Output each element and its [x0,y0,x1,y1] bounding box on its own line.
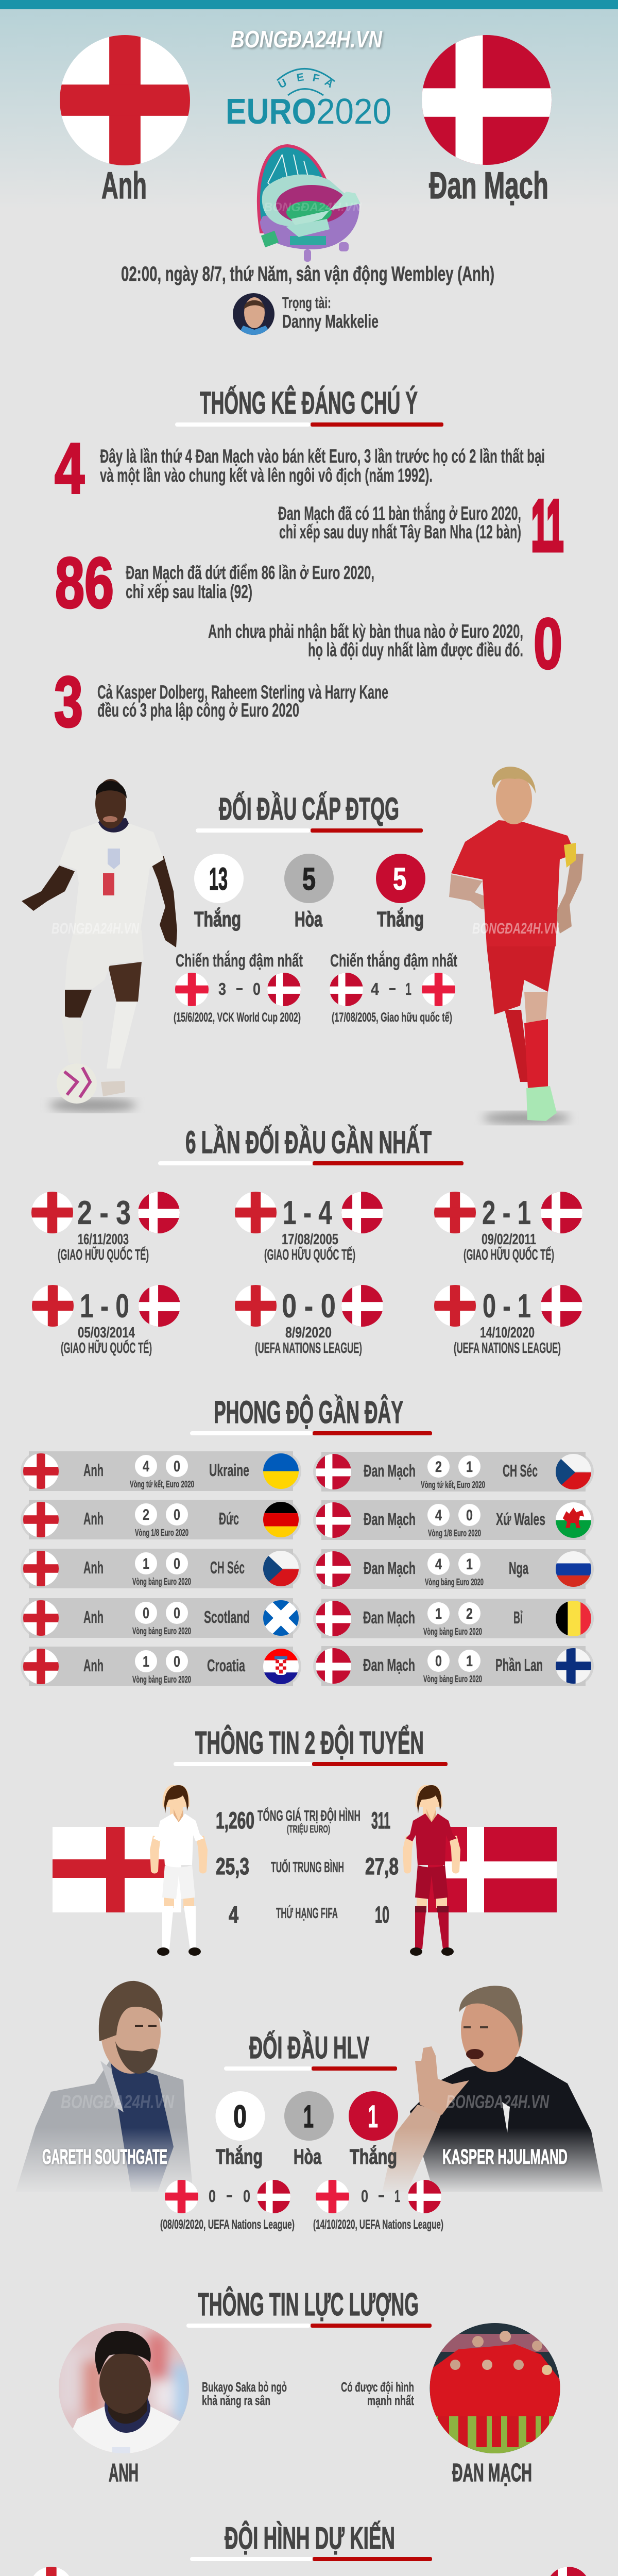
stat 4 [55,429,545,509]
form: England v Czech [21,1549,301,1588]
form: Denmark v Russia: 4 [435,1556,442,1573]
form: England v Scotland [21,1598,301,1638]
photo: Southgate: BONGĐA24H.VN [61,2091,175,2112]
stat 86 [55,543,374,623]
text: Denmark team news: Có được đội hình [341,2379,414,2395]
form: England v Germany: Anh [83,1509,104,1528]
logo: UEFA Euro 2020: A [322,76,335,90]
form: England v Croatia: Vòng bảng Euro 2020 [132,1674,191,1685]
form: Denmark v Wales [313,1500,594,1540]
coach totals: Hòa [294,2145,322,2168]
biggest win: Denmark [330,951,457,1025]
head-to-head totals: Thắng [194,907,241,931]
photo: Hjulmand [382,1986,603,2192]
form: England v Czech: 1 [143,1555,149,1572]
form: Denmark v Finland: 1 [466,1653,473,1670]
header gradient background [0,9,618,210]
match 2005: 1 - 4 [283,1194,332,1231]
head-to-head totals: 5 [393,861,406,896]
form: England v Czech: Anh [83,1558,104,1577]
flag: England on pitch [29,2567,73,2576]
text: England team news: khả năng ra sân [202,2393,270,2408]
player: Sterling: BONGĐA24H.VN [52,920,140,937]
form: Denmark v Belgium: Vòng bảng Euro 2020 [423,1626,482,1637]
team stats table: 1,260 [216,1807,254,1834]
biggest win: England [174,951,303,1025]
heading: Đối đầu cấp ĐTQG: ĐỐI ĐẦU CẤP ĐTQG [219,791,399,826]
biggest win: Denmark: 1 [405,979,411,998]
stat 3: 3 [54,662,83,742]
stat 86: Đan Mạch đã dứt điểm 86 lần ở Euro 2020, [126,562,374,583]
coach match 2: 1 [394,2187,400,2206]
biggest win: Denmark: Chiến thắng đậm nhất [330,951,457,971]
form: Denmark v Russia: Vòng bảng Euro 2020 [425,1577,484,1587]
team stats table: 25,3 [216,1853,249,1879]
form: Denmark v Russia [313,1549,594,1589]
heading: Thông tin lực lượng: THÔNG TIN LỰC LƯỢNG [198,2287,419,2323]
team stats table [216,1807,399,1928]
match 2014: 1 - 0 [80,1287,129,1325]
label: ANH: ANH [109,2459,139,2487]
form: Denmark v Finland: Phần Lan [495,1655,543,1674]
stat 4: 4 [55,429,84,509]
form: Denmark v Finland: Vòng bảng Euro 2020 [423,1674,482,1684]
coach totals: 1 [368,2099,378,2134]
form: Denmark v Wales: Xứ Wales [496,1510,545,1529]
form: England v Germany: 2 [143,1506,149,1523]
stat 86: 86 [55,543,114,623]
match 2005 [235,1192,383,1263]
form: Denmark v Wales: Đan Mạch [364,1510,416,1529]
heading: Đối đầu HLV [224,2030,397,2071]
match 2005: (GIAO HỮU QUỐC TẾ) [264,1246,355,1263]
form: Denmark v Russia: Nga [509,1558,528,1578]
coach totals [215,2091,398,2168]
photo: Hjulmand: BONGĐA24H.VN [446,2091,550,2112]
team stats table: 27,8 [365,1853,399,1879]
text: England team news: Bukayo Saka bỏ ngỏ [202,2379,287,2395]
team stats table: THỨ HẠNG FIFA [276,1904,338,1922]
form: Denmark v Wales: 4 [435,1507,442,1524]
biggest win: England: 0 [253,979,261,998]
form: Denmark v Wales: 0 [466,1507,473,1524]
stat 0 [208,604,562,684]
text: Denmark team news: mạnh nhất [367,2393,414,2408]
heading: 6 lần đối đầu gần nhất: 6 LẦN ĐỐI ĐẦU GẦN NHẤT [185,1125,432,1160]
form: Denmark v Wales: Vòng 1/8 Euro 2020 [428,1528,481,1538]
form: England v Ukraine: Anh [83,1461,104,1480]
heading: Phong độ gần đây: PHONG ĐỘ GẦN ĐÂY [214,1395,403,1430]
team stats table: (TRIỆU EURO) [287,1823,330,1835]
stat 86: chỉ xếp sau Italia (92) [126,581,252,602]
match 2003 [31,1192,180,1263]
form: Denmark v Finland [313,1646,594,1686]
logo: UEFA Euro 2020: EURO [226,91,316,131]
stat 4: và một lần vào chung kết và lên ngôi vô địch (năm 1992). [100,465,433,486]
photo: Saka [57,2321,191,2458]
match 2014: (GIAO HỮU QUỐC TẾ) [61,1339,152,1357]
form: Denmark v Finland: Đan Mạch [363,1655,415,1674]
form: England v Czech: CH Séc [210,1558,245,1577]
team stats table: TUỔI TRUNG BÌNH [271,1858,344,1876]
form: Denmark v Czech: 1 [466,1459,473,1476]
flag: Denmark on pitch [546,2567,590,2576]
team stats table: TỔNG GIÁ TRỊ ĐỘI HÌNH [258,1807,360,1824]
biggest win: England: (15/6/2002, VCK World Cup 2002) [174,1010,301,1025]
logo: Bongda24h: BONGĐA24H.VN [231,26,383,53]
biggest win: England: 3 [218,979,226,998]
flag: England large [60,35,190,165]
form: England v Ukraine [21,1451,301,1491]
player: Kjaer: BONGĐA24H.VN [472,920,559,937]
player: Sterling [22,779,177,1112]
flag: Denmark rectangle [428,1827,557,1912]
head-to-head totals: Hòa [295,907,323,931]
match 2003: 16/11/2003 [78,1231,129,1248]
form: England v Croatia: 0 [174,1653,180,1670]
form: Denmark v Belgium: Bỉ [513,1608,523,1627]
biggest win: Denmark: (17/08/2005, Giao hữu quốc tế) [332,1010,452,1025]
stat 3: đều có 3 pha lập công ở Euro 2020 [97,700,299,721]
form: England v Scotland: 0 [143,1605,149,1622]
stat 3: Cả Kasper Dolberg, Raheem Sterling và Harry Kane [97,682,388,703]
form: Denmark v Czech: CH Séc [503,1461,538,1480]
heading: Thông tin 2 đội tuyển: THÔNG TIN 2 ĐỘI TUYỂN [195,1725,424,1761]
form: Denmark v Finland: 0 [435,1653,442,1670]
biggest win: England: Chiến thắng đậm nhất [176,951,303,971]
head-to-head totals: Thắng [377,907,424,931]
head-to-head totals: 13 [209,861,228,896]
logo: UEFA Euro 2020: E [296,71,305,84]
match 2020 October: 0 - 1 [483,1287,531,1325]
text: England team news [202,2379,287,2408]
form: England v Scotland: Scotland [204,1607,250,1626]
form: England v Scotland: 0 [174,1605,180,1622]
logo: UEFA Euro 2020: U [277,77,289,91]
form: England v Germany [21,1500,301,1539]
flag: Denmark large [422,35,552,165]
form: England v Ukraine: 4 [143,1458,149,1475]
form: England v Germany: Đức [219,1509,239,1528]
coach totals: Thắng [216,2145,263,2168]
team stats table: 311 [371,1807,390,1834]
form: Denmark v Russia: Đan Mạch [364,1558,416,1578]
match 2011 [434,1192,582,1263]
team stats table: 10 [375,1902,389,1928]
stat 11 [278,486,563,566]
referee label: Trọng tài: [282,294,331,312]
player: Kjaer [449,767,583,1124]
text: Denmark team news [341,2379,414,2408]
match 2003: 2 - 3 [77,1194,131,1231]
match 2014 [32,1285,180,1357]
match 2003: (GIAO HỮU QUỐC TẾ) [58,1246,149,1263]
form: Denmark v Czech: 2 [435,1459,442,1476]
match 2020 September: 8/9/2020 [285,1325,332,1341]
team name: Anh: Anh [101,165,147,207]
head-to-head totals: 5 [302,861,316,896]
coach totals: 1 [303,2099,314,2134]
heading: Đối đầu HLV: ĐỐI ĐẦU HLV [249,2030,369,2065]
logo: UEFA Euro 2020: F [312,72,320,85]
match 2011: 2 - 1 [482,1194,531,1231]
coach match 2 [313,2180,443,2232]
stat 3 [54,662,388,742]
form: England v Ukraine: Ukraine [209,1461,249,1480]
form: England v Czech: Vòng bảng Euro 2020 [132,1577,191,1587]
team stats table: 4 [229,1902,238,1928]
icon: Wembley stadium: BONGĐA24H.VN [264,200,362,214]
form: England v Scotland: Anh [83,1607,104,1626]
coach match 1: 0 [209,2187,216,2206]
heading: Thông tin lực lượng [186,2287,432,2328]
stat 0: 0 [534,604,562,684]
form: Denmark v Czech: Vòng tứ kết, Euro 2020 [421,1480,485,1490]
match 2020 October [434,1285,582,1357]
heading: Phong độ gần đây [190,1395,432,1435]
form: Denmark v Belgium: 1 [435,1605,442,1622]
coach match 2: (14/10/2020, UEFA Nations League) [313,2217,443,2232]
match 2020 September: (UEFA NATIONS LEAGUE) [255,1340,362,1357]
heading: Đối đầu cấp ĐTQG [196,791,423,833]
match 2005: 17/08/2005 [282,1231,338,1248]
form: England v Croatia: Anh [83,1656,104,1675]
photo: Southgate [15,1981,193,2192]
head-to-head totals [194,854,425,931]
coach totals: Thắng [350,2145,397,2168]
logo: UEFA Euro 2020: 2020 [316,91,391,131]
match 2011: 09/02/2011 [482,1231,536,1248]
lineup pitch [29,2567,590,2576]
form: Denmark v Czech [313,1452,594,1492]
form: England v Croatia [21,1647,301,1686]
icon: Wembley stadium [259,146,362,262]
form: Denmark v Belgium: Đan Mạch [363,1608,415,1627]
biggest win: Denmark: 4 [371,979,380,998]
form: England v Germany: 0 [174,1506,180,1523]
top bar [0,0,618,9]
match 2020 September [235,1285,383,1357]
form: Denmark v Belgium: 2 [466,1605,473,1622]
heading: Đội hình dự kiến: ĐỘI HÌNH DỰ KIẾN [225,2521,395,2555]
label: ĐAN MẠCH: ĐAN MẠCH [452,2459,532,2487]
heading: Thống kê đáng chú ý: THỐNG KÊ ĐÁNG CHÚ Ý [200,385,418,420]
coach match 1: (08/09/2020, UEFA Nations League) [160,2217,295,2232]
form: Denmark v Czech: Đan Mạch [364,1461,416,1480]
logo: UEFA Euro 2020 [226,69,391,131]
photo: Denmark team [427,2321,562,2458]
form: England v Scotland: Vòng bảng Euro 2020 [132,1626,191,1636]
form: England v Czech: 0 [174,1555,180,1572]
heading: 6 lần đối đầu gần nhất [158,1125,464,1165]
photo: referee [233,293,274,335]
match 2014: 05/03/2014 [78,1325,135,1341]
coach match 1: 0 [243,2187,250,2206]
text: 11 [531,486,563,566]
figure: Denmark player [403,1785,460,1956]
match 2020 October: 14/10/2020 [480,1325,535,1341]
coach match 1 [160,2180,295,2232]
form: England v Ukraine: 0 [174,1458,180,1475]
heading: Thông tin 2 đội tuyển [174,1725,448,1766]
coach name: Gareth Southgate: GARETH SOUTHGATE [42,2145,167,2168]
fade over coach photos [10,2128,608,2195]
flag: England rectangle [53,1827,181,1912]
form: England v Croatia: 1 [143,1653,149,1670]
form: England v Croatia: Croatia [207,1656,245,1675]
match 2020 September: 0 - 0 [282,1287,336,1325]
match 2011: (GIAO HỮU QUỐC TẾ) [464,1246,554,1263]
referee name: Danny Makkelie [282,311,379,332]
figure: England player [150,1785,208,1956]
form: Denmark v Belgium [313,1599,594,1638]
form: England v Germany: Vòng 1/8 Euro 2020 [135,1528,188,1538]
team name: Đan Mạch: Đan Mạch [429,165,548,207]
heading: Đội hình dự kiến [190,2521,432,2561]
heading: Thống kê đáng chú ý [175,385,443,427]
form: Denmark v Russia: 1 [466,1556,473,1573]
form: England v Ukraine: Vòng tứ kết, Euro 2020 [130,1479,194,1489]
coach match 2: 0 [361,2187,368,2206]
coach totals: 0 [233,2099,247,2134]
